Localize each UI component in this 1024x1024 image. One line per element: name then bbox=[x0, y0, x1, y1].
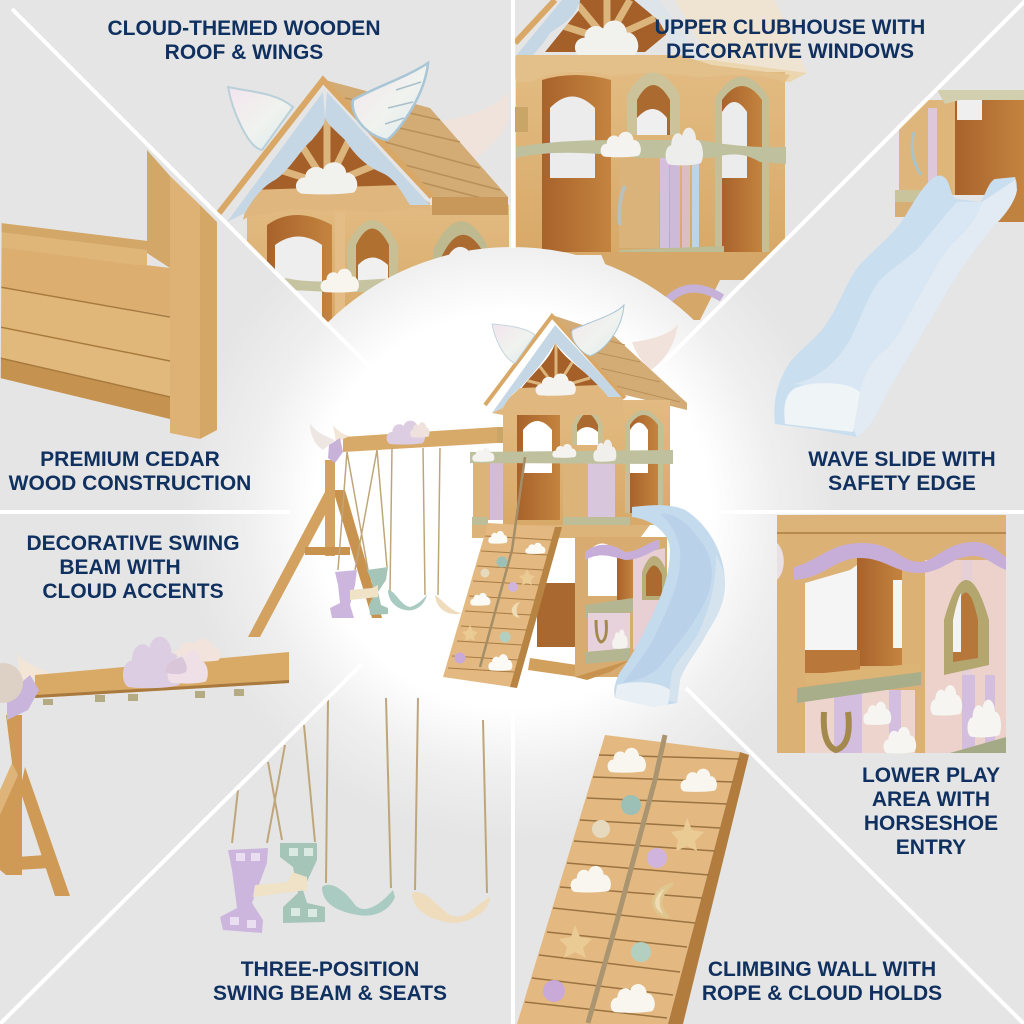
panel: swing beam bbox=[0, 637, 289, 896]
heading: roof: ROOF & WINGS bbox=[165, 41, 323, 64]
heading: clubhouse: DECORATIVE WINDOWS bbox=[666, 40, 914, 63]
base bbox=[619, 246, 724, 252]
roof bbox=[675, 0, 807, 73]
wings bbox=[492, 324, 535, 363]
fascia bbox=[219, 80, 432, 213]
header beam bbox=[243, 185, 430, 220]
left opening bbox=[805, 565, 857, 655]
soft white mask over upper panels bbox=[249, 247, 775, 510]
swing frame bbox=[248, 421, 507, 637]
counter bbox=[805, 663, 920, 685]
body bbox=[503, 400, 670, 525]
holds bbox=[470, 531, 545, 671]
posts bbox=[147, 150, 170, 268]
panel: roof and wings bbox=[219, 63, 509, 325]
door bbox=[563, 463, 588, 517]
ropes bbox=[232, 698, 487, 893]
clubhouse fragment bbox=[895, 90, 1024, 222]
heading: lower play area: HORSESHOE bbox=[864, 812, 998, 835]
cream swing seat bbox=[412, 892, 490, 923]
sill bbox=[0, 223, 147, 265]
header bbox=[492, 385, 623, 415]
gable bbox=[520, 343, 600, 390]
icon: left wing bbox=[228, 87, 293, 150]
heading: swing beam: CLOUD ACCENTS bbox=[42, 580, 224, 603]
heading: roof bbox=[108, 17, 380, 64]
panel: wave slide bbox=[774, 90, 1024, 437]
base bbox=[563, 517, 630, 527]
icon: back wing bbox=[443, 93, 508, 160]
glider bar bbox=[253, 872, 307, 897]
slide body bbox=[774, 176, 1017, 437]
roof bbox=[328, 80, 508, 197]
hinge plate bbox=[515, 107, 528, 132]
tower bbox=[470, 305, 687, 538]
heading: swing beam: DECORATIVE SWING bbox=[26, 532, 240, 555]
teal swing seat bbox=[322, 885, 395, 916]
heading: clubhouse bbox=[655, 16, 925, 63]
rope bbox=[480, 457, 525, 667]
floor bbox=[600, 252, 770, 320]
panel: swings bbox=[220, 698, 490, 933]
colored holds bbox=[621, 795, 641, 815]
roof bbox=[552, 315, 687, 410]
rope bbox=[588, 735, 665, 1023]
heading: climbing wall: CLIMBING WALL WITH bbox=[708, 958, 936, 981]
heading: swings: THREE-POSITION bbox=[241, 958, 419, 981]
blue bargeboards bbox=[227, 92, 325, 222]
openings bbox=[517, 407, 560, 520]
hardware bbox=[43, 689, 244, 705]
clouds bbox=[863, 685, 1001, 753]
slide lip bbox=[784, 383, 860, 432]
bargeboards bbox=[515, 0, 580, 80]
planks bbox=[0, 247, 170, 419]
wave slide bbox=[614, 505, 725, 707]
icon: horseshoe bbox=[824, 712, 849, 750]
swings bbox=[330, 448, 462, 618]
heading: roof: CLOUD-THEMED WOODEN bbox=[108, 17, 380, 40]
slide rim bbox=[853, 180, 1017, 437]
door bbox=[619, 158, 699, 248]
panel: lower play area bbox=[777, 515, 1006, 753]
back wing bbox=[632, 324, 678, 370]
heading: wave slide: SAFETY EDGE bbox=[828, 472, 976, 495]
clubhouse walls bbox=[247, 205, 509, 325]
cloud holds bbox=[571, 748, 717, 1013]
arched window bbox=[944, 580, 989, 675]
gable bbox=[262, 118, 397, 190]
lilac trim bbox=[794, 542, 1006, 580]
moon bbox=[654, 884, 673, 917]
gable bbox=[545, 0, 668, 52]
fascia bbox=[485, 316, 625, 405]
frame bbox=[0, 715, 70, 896]
heading: clubhouse: UPPER CLUBHOUSE WITH bbox=[655, 16, 925, 39]
heading: wave slide: WAVE SLIDE WITH bbox=[808, 448, 996, 471]
panel: clubhouse bbox=[515, 0, 807, 320]
slide chute bbox=[793, 202, 982, 390]
lilac glider seat bbox=[220, 848, 268, 933]
cream wing bbox=[17, 653, 50, 680]
heading: lower play area bbox=[862, 764, 1000, 859]
heading: lower play area: AREA WITH bbox=[872, 788, 990, 811]
walls bbox=[516, 72, 785, 255]
heading: wave slide bbox=[808, 448, 996, 495]
heading: lower play area: ENTRY bbox=[896, 836, 966, 859]
lower left pink wall bbox=[805, 690, 915, 753]
heading: cedar wood: WOOD CONSTRUCTION bbox=[9, 472, 251, 495]
bracket bbox=[7, 675, 39, 720]
heading: lower play area: LOWER PLAY bbox=[862, 764, 1000, 787]
right pink wall bbox=[925, 560, 1006, 753]
heading: swings: SWING BEAM & SEATS bbox=[213, 982, 447, 1005]
central playset bbox=[248, 305, 725, 707]
heading: climbing wall bbox=[702, 958, 942, 1005]
heading: cedar wood bbox=[9, 448, 251, 495]
heading: swings bbox=[213, 958, 447, 1005]
panel: cedar wood bbox=[0, 150, 217, 439]
heading: swing beam bbox=[26, 532, 240, 603]
heading: cedar wood: PREMIUM CEDAR bbox=[40, 448, 220, 471]
cloud bbox=[296, 162, 357, 194]
panel: climbing wall bbox=[517, 735, 749, 1024]
rail bbox=[516, 140, 786, 164]
clouds bbox=[173, 639, 221, 662]
lower play area bbox=[528, 537, 667, 680]
heading: swing beam: BEAM WITH bbox=[59, 556, 181, 579]
bargeboards bbox=[492, 325, 555, 413]
icon: right wing bbox=[353, 63, 428, 140]
rail bbox=[470, 450, 673, 464]
sage board bbox=[797, 672, 921, 703]
heading: climbing wall: ROPE & CLOUD HOLDS bbox=[702, 982, 942, 1005]
stars bbox=[671, 818, 704, 851]
climbing wall bbox=[443, 457, 562, 688]
teal glider seat bbox=[280, 843, 325, 923]
beam bbox=[35, 652, 289, 698]
